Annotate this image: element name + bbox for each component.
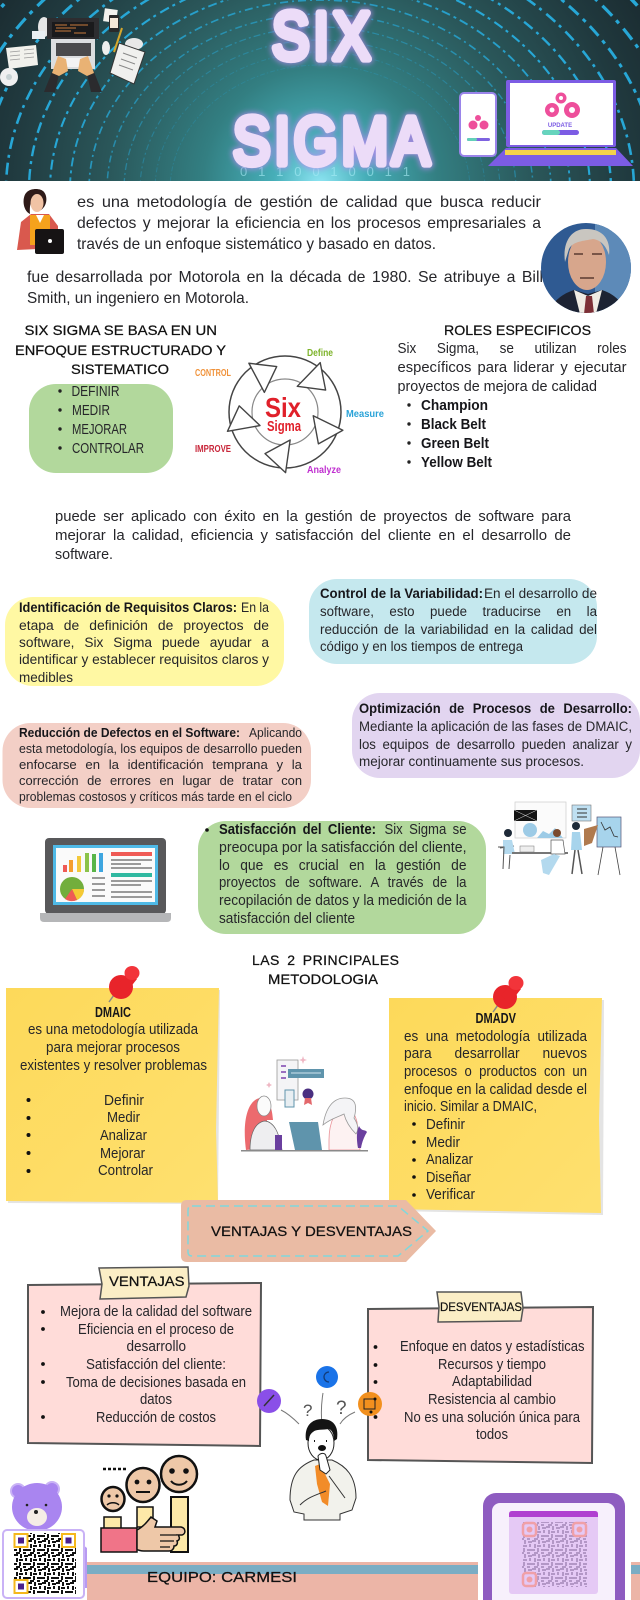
DMAIC list: Medir	[107, 1110, 140, 1126]
panel: satisfaccion del cliente: Satisfacción del Cliente:	[219, 822, 376, 838]
text block: application to software: software.	[55, 547, 113, 563]
panel: DMADV note: inicio. Similar a DMAIC,	[404, 1099, 537, 1115]
panel: control de la variabilidad: código y en los tiempos de entrega	[320, 639, 523, 654]
DMAIC list: Analizar	[100, 1128, 147, 1144]
panel: DMADV note: es una metodología utilizada	[404, 1029, 588, 1045]
ventajas list: Eficiencia en el proceso de	[78, 1322, 234, 1338]
chart: six sigma cycle: IMPROVE	[195, 444, 231, 455]
panel: satisfaccion del cliente: preocupa por la satisfacción del cliente,	[219, 840, 466, 856]
DMADV list: Analizar	[426, 1152, 473, 1168]
panel: DMAIC note: existentes y resolver problemas	[20, 1058, 207, 1074]
text block: application to software: puede ser aplicado con éxito en la gestión de proyectos de software para	[55, 509, 572, 525]
panel: optimizacion de procesos	[352, 693, 640, 778]
chart: six sigma cycle: Sigma	[267, 418, 301, 435]
panel: control de la variabilidad: software, esto puede traducirse en la	[320, 604, 597, 619]
text: definition: través de un enfoque sistemático y basado en datos.	[77, 236, 436, 253]
heading: structured approach	[15, 322, 227, 377]
ventajas list: Toma de decisiones basada en	[66, 1375, 246, 1391]
text: definition: defectos y mejorar la eficiencia en los procesos empresariales a	[77, 215, 541, 232]
DMADV list: Diseñar	[426, 1170, 471, 1186]
panel: control de la variabilidad: reducción de la variabilidad en la calidad del	[320, 622, 597, 637]
ventajas list: Reducción de costos	[96, 1410, 216, 1426]
heading: two main methodologies: METODOLOGIA	[268, 971, 379, 987]
panel: DMADV note: DMADV	[476, 1011, 516, 1027]
team name: EQUIPO: CARMESI	[147, 1569, 297, 1586]
DMADV list	[412, 1117, 475, 1203]
icon: thinking person: ?	[336, 1398, 347, 1419]
panel: DMADV note: procesos o productos con un	[404, 1064, 587, 1080]
text: origin: Smith, un ingeniero en Motorola.	[27, 290, 249, 307]
panel: reduccion de defectos	[2, 723, 311, 808]
icon: blue circle	[316, 1366, 338, 1388]
DMAIC list: Mejorar	[100, 1146, 145, 1162]
panel: requisitos claros: software, Six Sigma puede ayudar a	[19, 635, 269, 650]
text block: specific roles: ROLES ESPECIFICOS	[444, 322, 591, 338]
icon: two women talking	[241, 1056, 368, 1152]
text block: specific roles	[398, 322, 627, 471]
header banner	[0, 0, 640, 181]
panel: reduccion de defectos: enfocarse en la identificación temprana y la	[19, 757, 303, 772]
ventajas list	[41, 1304, 252, 1426]
text block: specific roles: Six Sigma, se utilizan roles	[398, 341, 626, 357]
heading: two main methodologies	[252, 952, 399, 987]
icon: laptop with dashboard	[40, 838, 171, 922]
chart: six sigma cycle: Analyze	[307, 465, 341, 476]
heading: structured approach: SIX SIGMA SE BASA EN UN	[24, 322, 217, 338]
panel: DMADV note	[389, 998, 604, 1215]
panel: requisitos claros: Identificación de Requisitos Claros:	[19, 600, 237, 615]
icon: purple teddy bear	[3, 1482, 87, 1588]
DMAIC list	[26, 1093, 153, 1179]
icon: thinking person: ?	[303, 1401, 312, 1420]
panel: DMAIC note: DMAIC	[95, 1005, 131, 1021]
ventajas list: desarrollo	[126, 1339, 186, 1355]
banner arrow: ventajas y desventajas	[181, 1200, 436, 1262]
desventajas list: Adaptabilidad	[452, 1374, 532, 1390]
panel: satisfaccion del cliente: satisfacción del cliente	[219, 911, 355, 927]
desventajas list: Resistencia al cambio	[428, 1392, 556, 1408]
portrait: Bill Smith	[541, 223, 631, 313]
panel: satisfaccion del cliente: lo que es crucial en la gestión de	[219, 858, 466, 874]
panel: DMADV note: enfoque en la calidad desde el	[404, 1082, 587, 1098]
icon: purple circle with brush	[257, 1389, 281, 1413]
desventajas list: Recursos y tiempo	[438, 1357, 546, 1373]
panel: DMAIC note	[6, 988, 220, 1204]
QR code left	[3, 1530, 84, 1598]
footer band	[87, 1562, 640, 1600]
title: SIGMA	[233, 104, 433, 179]
header banner: 0 1 1 0 0 1 0 0 1 1	[240, 164, 410, 179]
panel: requisitos claros: En la	[241, 600, 269, 615]
panel: reduccion de defectos: corrección de errores en lugar de tratar con	[19, 773, 302, 788]
steps list: DEFINIR	[72, 384, 120, 400]
text block: specific roles: proyectos de mejora de calidad	[398, 379, 597, 395]
DMADV list: Verificar	[426, 1187, 475, 1203]
tag: ventajas	[99, 1267, 189, 1299]
heading: structured approach: SISTEMATICO	[71, 361, 169, 377]
banner arrow: ventajas y desventajas: VENTAJAS Y DESVENTAJAS	[211, 1223, 412, 1239]
text: definition	[77, 194, 542, 253]
ventajas list: Mejora de la calidad del software	[60, 1304, 252, 1320]
panel: optimizacion de procesos: Mediante la aplicación de las fases de DMAIC,	[359, 719, 632, 734]
chart: six sigma cycle: CONTROL	[195, 368, 231, 379]
steps list	[58, 384, 144, 457]
desventajas list: todos	[476, 1427, 508, 1443]
tag: ventajas: VENTAJAS	[109, 1273, 184, 1289]
tag: desventajas: DESVENTAJAS	[440, 1300, 522, 1314]
QR code right	[483, 1493, 625, 1600]
panel: satisfaccion del cliente: Six Sigma se	[384, 822, 466, 838]
ventajas list: datos	[140, 1392, 172, 1408]
text block: specific roles: Champion	[421, 398, 488, 414]
icon: woman with laptop	[17, 189, 64, 254]
panel: control de la variabilidad: Control de la Variabilidad:	[320, 586, 483, 601]
panel: control de la variabilidad	[309, 579, 597, 664]
icon: red pin right	[493, 976, 524, 1012]
DMADV list: Definir	[426, 1117, 465, 1133]
title: SIGMA	[233, 104, 433, 179]
panel: reduccion de defectos: esta metodología, los equipos de desarrollo pueden	[19, 741, 302, 756]
icon: desk with laptop	[0, 8, 145, 92]
panel: satisfaccion del cliente: recopilación de datos y la medición de la	[219, 893, 467, 909]
icon: team analysing charts	[498, 802, 621, 875]
icon: thinking person	[281, 1393, 356, 1520]
text block: specific roles: específicos para liderar y ejecutar	[398, 360, 627, 376]
text: origin: fue desarrollada por Motorola en la década de 1980. Se atribuye a Bill	[27, 269, 543, 286]
panel: desventajas	[368, 1292, 593, 1463]
icon: devices with gears: UPDATE	[548, 123, 572, 129]
text block: specific roles: Yellow Belt	[421, 455, 492, 471]
panel: control de la variabilidad: En el desarrollo de	[484, 586, 597, 601]
panel: ventajas	[28, 1267, 261, 1446]
desventajas list	[374, 1339, 584, 1443]
desventajas list: Enfoque en datos y estadísticas	[400, 1339, 584, 1355]
panel: reduccion de defectos: Aplicando	[249, 725, 302, 740]
heading: structured approach: ENFOQUE ESTRUCTURADO Y	[15, 342, 227, 358]
panel: reduccion de defectos: Reducción de Defectos en el Software:	[19, 725, 240, 740]
panel: optimizacion de procesos: Optimización de Procesos de Desarrollo:	[359, 701, 632, 716]
steps list: MEDIR	[72, 403, 110, 419]
panel: DMAIC note: para mejorar procesos	[46, 1040, 180, 1056]
chart: six sigma cycle: Six	[265, 392, 301, 423]
title: SIX	[272, 0, 374, 74]
title: SIX	[272, 0, 374, 74]
panel: satisfaccion del cliente	[198, 821, 486, 934]
ventajas list: Satisfacción del cliente:	[86, 1357, 226, 1373]
icon: orange circle with crop	[358, 1392, 382, 1416]
panel: reduccion de defectos: problemas costosos y críticos más tarde en el ciclo	[19, 789, 292, 804]
panel: requisitos claros: identificar y establecer requisitos claros y	[19, 652, 269, 667]
panel: optimizacion de procesos: los equipos de desarrollo pueden analizar y	[359, 737, 632, 752]
panel: DMADV note: para desarrollar nuevos	[404, 1046, 587, 1062]
desventajas list: No es una solución única para	[404, 1410, 581, 1426]
text block: application to software: mejorar la calidad, eficiencia y satisfacción del cliente en el desarrollo de	[55, 528, 571, 544]
text block: specific roles: Black Belt	[421, 417, 486, 433]
text: origin	[27, 269, 543, 307]
chart: six sigma cycle	[195, 348, 384, 476]
panel: requisitos claros: medibles	[19, 670, 73, 685]
text: definition: es una metodología de gestión de calidad que busca reducir	[77, 194, 542, 211]
heading: two main methodologies: LAS 2 PRINCIPALES	[252, 952, 399, 968]
tag: desventajas	[437, 1292, 523, 1322]
text block: specific roles: Green Belt	[421, 436, 489, 452]
panel: DMAIC note: es una metodología utilizada	[28, 1022, 199, 1038]
DMAIC list: Controlar	[98, 1163, 153, 1179]
panel: requisitos claros: etapa de definición de proyectos de	[19, 618, 269, 633]
panel: satisfaccion del cliente: proyectos de software. A través de la	[219, 875, 467, 891]
icon: devices with gears	[460, 80, 633, 166]
steps list: CONTROLAR	[72, 441, 144, 457]
chart: six sigma cycle: Measure	[346, 409, 384, 420]
chart: six sigma cycle: Define	[307, 348, 333, 359]
DMADV list: Medir	[426, 1135, 460, 1151]
DMAIC list: Definir	[104, 1093, 144, 1109]
icon: faces with thumbs up	[101, 1456, 197, 1552]
title	[233, 0, 433, 179]
steps list: MEJORAR	[72, 422, 127, 438]
panel: optimizacion de procesos: mejorar continuamente sus procesos.	[359, 754, 584, 769]
panel: DMAIC steps	[29, 384, 173, 473]
text block: application to software	[55, 509, 572, 563]
panel: requisitos claros	[5, 597, 284, 686]
icon: red pin left	[109, 966, 140, 1002]
